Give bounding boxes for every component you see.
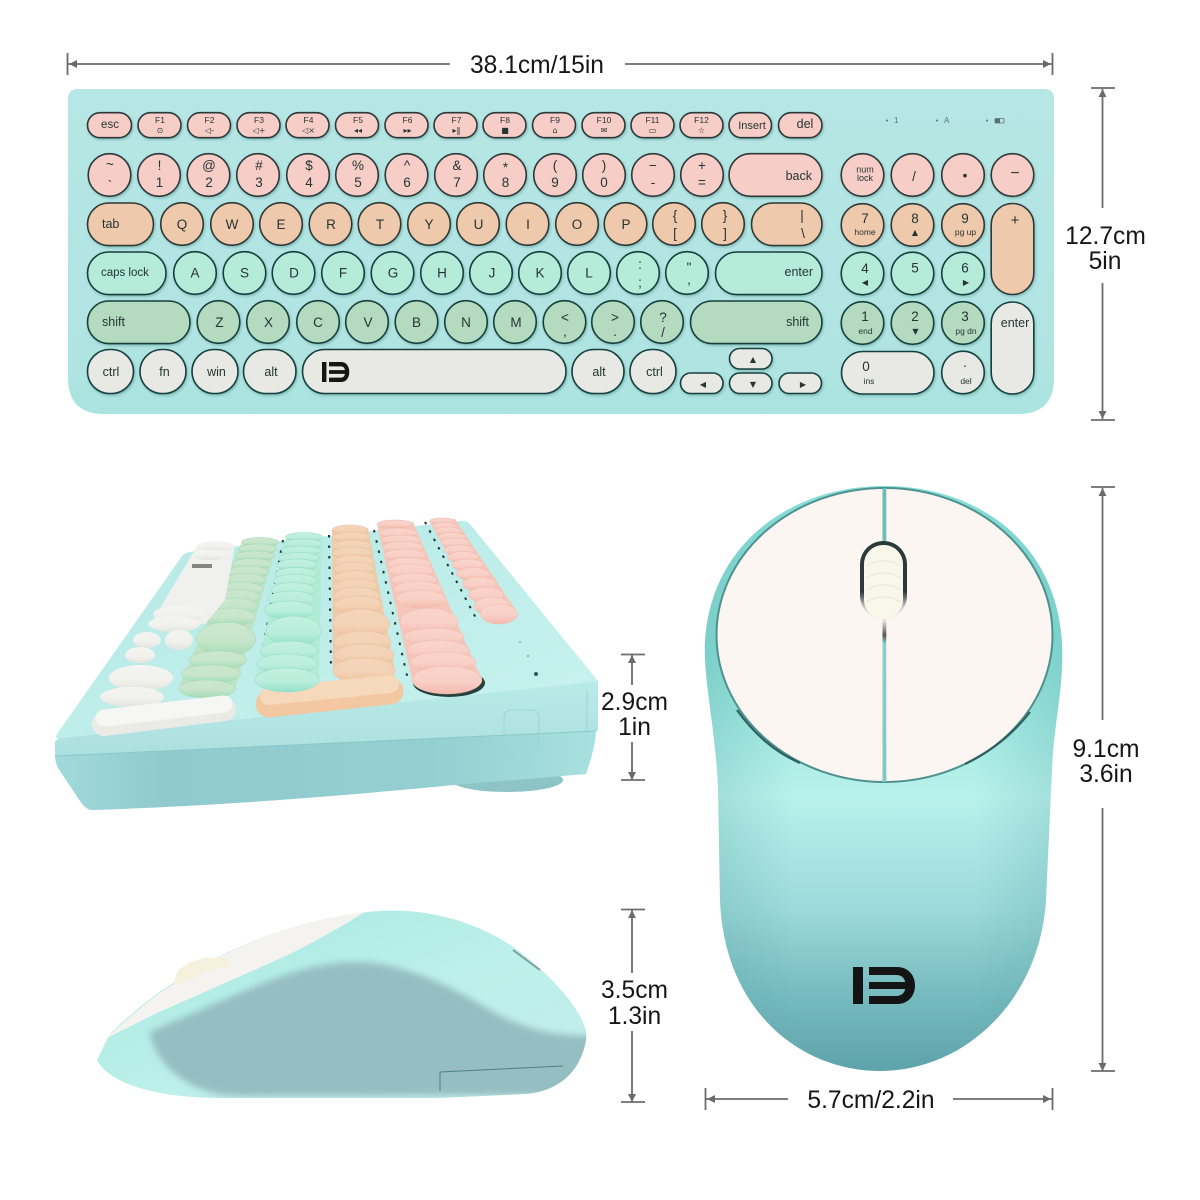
numeric keypad: 7	[861, 211, 869, 226]
dimension: keyboard depth	[1065, 88, 1146, 420]
key row: home row: L	[585, 266, 593, 280]
status indicators: A	[944, 116, 950, 125]
key row: function keys: ■	[501, 126, 509, 135]
key row: QWERTY row: W	[226, 217, 239, 232]
white top shell	[716, 488, 1052, 782]
key row: QWERTY row: |	[800, 208, 804, 223]
key row: shift row: X	[264, 315, 273, 330]
key row: bottom row and space bar: alt	[264, 365, 278, 379]
dimension: mouse length: 9.1cm	[1073, 736, 1139, 763]
seam and USB door	[55, 690, 596, 756]
key row: function keys: F2	[205, 115, 215, 125]
numeric keypad: −	[1010, 165, 1020, 182]
key row: number row: ^	[404, 158, 411, 173]
key row: home row: S	[240, 266, 249, 280]
mouse white top shell	[107, 912, 367, 1038]
key row: function keys: Insert	[738, 120, 766, 132]
scroll wheel	[860, 541, 907, 619]
key row: shift row: <	[561, 310, 569, 325]
key row: number row: @	[202, 158, 216, 173]
key row: function keys: F1	[155, 115, 165, 125]
dimension: mouse length	[1073, 487, 1139, 1071]
key row: shift row: C	[313, 315, 323, 330]
key row: function keys: ⌂	[552, 126, 558, 135]
key row: number row: 8	[502, 175, 509, 190]
status indicators: 1	[894, 116, 899, 125]
key row: home row: D	[289, 266, 299, 280]
key row: number row: −	[649, 158, 657, 173]
numeric keypad	[841, 154, 1034, 394]
key row: function keys: ☆	[698, 126, 705, 135]
key row: bottom row and space bar: ctrl	[103, 365, 119, 379]
sensor edge	[513, 950, 540, 970]
key row: number row: )	[602, 158, 606, 173]
key row: function keys: F10	[597, 115, 612, 125]
dimension: mouse width	[706, 1087, 1052, 1114]
key row: home row: G	[388, 266, 398, 280]
key row: number row: `	[108, 178, 112, 193]
key row: function keys: F7	[452, 115, 462, 125]
key row: home row: :	[638, 257, 642, 272]
key row: home row: A	[190, 266, 200, 280]
key row: shift row: shift	[102, 315, 125, 329]
keyboard body	[68, 89, 1054, 414]
numeric keypad: home	[854, 227, 876, 237]
dimension: mouse height	[601, 910, 668, 1102]
numeric keypad: ▶	[963, 278, 970, 287]
dimension: keyboard depth: 5in	[1089, 248, 1121, 275]
dimension: keyboard height	[601, 654, 668, 780]
key row: function keys: F3	[254, 115, 264, 125]
dimension: keyboard depth: 12.7cm	[1065, 223, 1146, 250]
key row: QWERTY row: E	[276, 217, 286, 232]
mouse side shaded panel	[150, 962, 595, 1096]
numeric keypad: 9	[961, 211, 969, 226]
key column: shift row, sage	[178, 538, 278, 698]
key row: number row: *	[503, 160, 509, 175]
shell shadow arcs	[737, 710, 1030, 764]
key row: home row: F	[339, 266, 347, 280]
key row: number row	[88, 154, 822, 196]
key row: QWERTY row	[88, 203, 822, 246]
key row: function keys: ◁-	[204, 126, 214, 135]
battery door line	[440, 1066, 563, 1091]
numeric keypad: num	[856, 164, 874, 174]
key row: number row: 5	[354, 175, 362, 190]
key row: number row: !	[158, 158, 161, 173]
key row: function keys: esc	[101, 119, 119, 131]
key column: home row, mint	[255, 532, 322, 692]
key row: bottom row and space bar: win	[206, 365, 226, 379]
dimension: mouse height: 1.3in	[608, 1003, 661, 1030]
dimension: keyboard height: 1in	[618, 714, 651, 741]
mouse body	[705, 486, 1062, 1071]
panel: mouse side view	[97, 911, 595, 1098]
numeric keypad: 4	[861, 261, 869, 276]
key column: function row, pink	[425, 518, 518, 624]
key row: number row: #	[255, 158, 263, 173]
numeric keypad: pg dn	[955, 326, 977, 336]
key row: shift row	[88, 301, 822, 344]
key row: number row: 0	[600, 175, 608, 190]
key row: function keys: ⊙	[157, 126, 163, 135]
key row: home row: J	[489, 266, 495, 280]
numeric keypad: enter	[1001, 316, 1029, 330]
key row: shift row: ,	[563, 324, 567, 339]
key row: function keys: del	[797, 117, 813, 131]
panel: keyboard top view	[68, 89, 1054, 414]
key row: home row: "	[687, 260, 692, 275]
numeric keypad: 3	[961, 309, 969, 324]
key row: bottom row and space bar: ctrl	[646, 365, 663, 379]
key row: home row: ,	[687, 272, 691, 287]
numeric keypad: .	[963, 355, 967, 370]
numeric keypad: ▲	[912, 228, 919, 237]
key row: function keys: ◁×	[301, 126, 315, 135]
key row: number row: %	[352, 158, 364, 173]
numeric keypad: lock	[857, 173, 873, 183]
key row: QWERTY row: }	[723, 208, 728, 223]
numeric keypad: ◀	[862, 278, 869, 287]
key row: home row: ;	[638, 275, 642, 290]
dimension: mouse height: 3.5cm	[601, 977, 668, 1004]
mouse body silhouette	[97, 911, 586, 1098]
indicator lights	[519, 641, 538, 676]
key column: bottom row, white, with space bar	[100, 541, 235, 724]
key row: number row: 4	[305, 175, 313, 190]
key row: function keys: ✉	[601, 126, 607, 135]
scroll wheel	[173, 958, 232, 985]
key row: bottom row and space bar: ▶	[800, 380, 807, 389]
key row: function keys: ◁+	[252, 126, 265, 135]
key row: home row: enter	[784, 265, 813, 279]
key row: bottom row and space bar: alt	[592, 365, 606, 379]
numeric keypad: del	[960, 376, 972, 386]
key row: function keys: F8	[500, 115, 510, 125]
key row: function keys	[88, 113, 822, 138]
key row: home row: K	[535, 266, 545, 280]
key row: shift row: M	[510, 315, 522, 330]
key row: QWERTY row: T	[376, 217, 384, 232]
dimension: keyboard width	[68, 52, 1052, 79]
key row: QWERTY row: P	[621, 217, 631, 232]
key row: number row: +	[698, 158, 706, 173]
key row: number row: 1	[156, 175, 163, 190]
key row: home row: H	[437, 266, 447, 280]
key row: function keys: F9	[550, 115, 560, 125]
key row: shift row: N	[461, 315, 471, 330]
key row: number row: &	[452, 158, 462, 173]
key row: QWERTY row: I	[526, 217, 530, 232]
key row: function keys: F5	[353, 115, 363, 125]
key row: QWERTY row: R	[326, 217, 336, 232]
key row: QWERTY row: O	[572, 217, 582, 232]
keyboard top surface	[56, 521, 598, 738]
key row: number row: 3	[255, 175, 263, 190]
key row: number row: 9	[551, 175, 559, 190]
key row: number row: 7	[453, 175, 461, 190]
key row: shift row: shift	[786, 315, 810, 329]
numeric keypad: ▼	[912, 327, 919, 336]
key row: function keys: F11	[645, 115, 660, 125]
body edge shading	[705, 486, 1062, 1071]
key row: shift row: >	[611, 310, 619, 325]
key row: bottom row and space bar: fn	[159, 365, 170, 379]
numeric keypad: ins	[864, 376, 874, 386]
panel: keyboard side view	[55, 518, 598, 810]
key row: QWERTY row: tab	[102, 217, 119, 231]
key column: QWERTY row, tan	[269, 525, 395, 704]
key row: function keys: F12	[694, 115, 709, 125]
tan long key	[269, 684, 390, 704]
key row: shift row: ?	[659, 310, 667, 325]
key row: QWERTY row: ]	[723, 226, 727, 241]
key row: shift row: .	[613, 324, 617, 339]
key row: number row: ~	[106, 157, 114, 172]
key row: shift row: Z	[215, 315, 224, 330]
key row: shift row: B	[412, 315, 421, 330]
foot	[451, 768, 563, 792]
key row: QWERTY row: {	[673, 208, 678, 223]
numeric keypad: 2	[911, 309, 919, 324]
key row: QWERTY row: \	[801, 226, 805, 241]
key row: function keys: ◂◂	[354, 126, 362, 135]
status indicators	[886, 116, 1004, 125]
key row: shift row: /	[661, 325, 665, 340]
key row: function keys: F4	[304, 115, 314, 125]
key row: shift row: V	[363, 315, 373, 330]
key row: bottom row and space bar	[88, 348, 822, 394]
icon: FD logo	[853, 967, 915, 1004]
key row: function keys: ▸▸	[403, 126, 412, 135]
numeric keypad: /	[912, 169, 916, 184]
key row: number row: 2	[205, 175, 213, 190]
key column: number row, pink	[374, 520, 485, 697]
key row: bottom row and space bar: ◀	[700, 380, 707, 389]
key row: home row: caps lock	[101, 267, 149, 279]
key row: QWERTY row: Q	[177, 217, 187, 232]
key row: home row	[88, 252, 822, 295]
dimension: keyboard width: 38.1cm/15in	[470, 52, 604, 79]
centre slit	[882, 488, 886, 782]
key row: number row: back	[786, 169, 813, 183]
numeric keypad: 0	[862, 359, 870, 374]
dimension: mouse width: 5.7cm/2.2in	[807, 1087, 935, 1114]
icon: FD logo on space bar	[322, 362, 349, 382]
key row: QWERTY row: Y	[424, 217, 434, 232]
key row: bottom row and space bar: ▲	[750, 355, 757, 364]
key row: function keys: F6	[403, 115, 413, 125]
numeric keypad: end	[858, 326, 873, 336]
keyboard lower shell	[55, 731, 596, 810]
numeric keypad: +	[1011, 212, 1020, 229]
key row: QWERTY row: U	[474, 217, 483, 232]
key row: bottom row and space bar: ▼	[750, 380, 757, 389]
dimension: mouse length: 3.6in	[1079, 761, 1133, 788]
key row: number row: 6	[403, 175, 411, 190]
key row: function keys: ▸‖	[452, 126, 461, 135]
panel: mouse top view	[705, 486, 1062, 1071]
numeric keypad: 1	[861, 309, 869, 324]
numeric keypad: 6	[961, 260, 969, 276]
dimension: keyboard height: 2.9cm	[601, 689, 668, 716]
key row: QWERTY row: [	[673, 226, 677, 241]
numeric keypad: •	[963, 168, 968, 183]
numeric keypad: pg up	[955, 227, 976, 237]
numeric keypad: 5	[911, 260, 919, 276]
key row: number row: =	[698, 175, 706, 190]
keyboard front face	[55, 681, 598, 756]
key row: function keys: ▭	[649, 126, 656, 135]
key row: number row: (	[553, 158, 558, 173]
key row: number row: -	[651, 175, 655, 190]
key row: number row: $	[305, 158, 313, 173]
numeric keypad: 8	[911, 211, 919, 226]
